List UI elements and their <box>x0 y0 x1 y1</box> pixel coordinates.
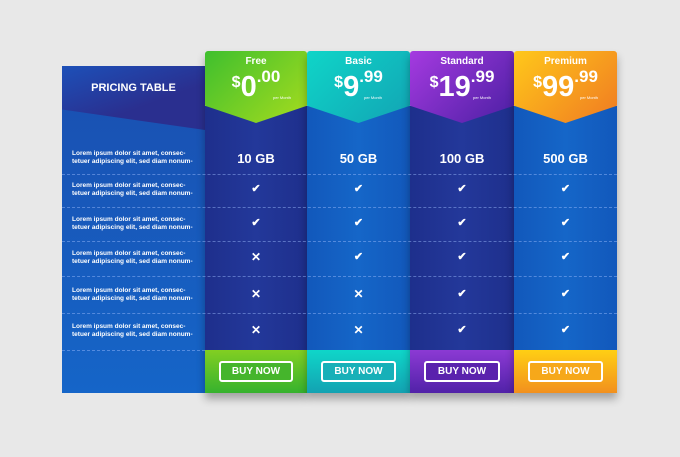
values: ✔ <box>561 251 570 263</box>
values: ✔ <box>354 217 363 229</box>
feature rows: tetuer adipiscing elit, sed diam nonum- <box>72 258 193 265</box>
feature rows: Lorem ipsum dolor sit amet, consec- <box>72 287 185 294</box>
feature rows <box>72 150 193 338</box>
values: ✕ <box>251 323 261 337</box>
column: Premium <box>514 51 617 393</box>
values: ✕ <box>251 287 261 301</box>
header: Premium: $99.99 <box>533 67 598 103</box>
values: ✕ <box>251 250 261 264</box>
header: Free: $0.00 <box>232 67 280 103</box>
values: ✔ <box>251 183 261 195</box>
values: ✔ <box>251 217 261 229</box>
values: ✔ <box>457 217 467 229</box>
button: Standard <box>410 350 514 393</box>
header: Basic: per Month <box>364 95 382 100</box>
header: Free: Free <box>245 56 267 67</box>
values: ✔ <box>457 288 467 300</box>
header: Premium <box>514 51 617 123</box>
header: Basic <box>307 51 410 123</box>
values: 10 GB <box>237 151 275 166</box>
feature rows: Lorem ipsum dolor sit amet, consec- <box>72 182 185 189</box>
title banner <box>62 66 205 130</box>
header: Basic: $9.99 <box>334 67 383 103</box>
values: 50 GB <box>340 151 377 166</box>
title: PRICING TABLE <box>91 82 176 94</box>
values: 500 GB <box>543 151 588 166</box>
column: Basic <box>307 51 410 393</box>
feature rows: tetuer adipiscing elit, sed diam nonum- <box>72 295 193 302</box>
values <box>237 151 275 337</box>
button: Free <box>205 350 307 393</box>
left panel <box>62 66 205 393</box>
feature rows: Lorem ipsum dolor sit amet, consec- <box>72 216 185 223</box>
feature rows: tetuer adipiscing elit, sed diam nonum- <box>72 190 193 197</box>
values: ✔ <box>561 183 570 195</box>
values: ✔ <box>561 217 570 229</box>
values <box>340 151 377 337</box>
feature rows: Lorem ipsum dolor sit amet, consec- <box>72 150 185 157</box>
header: Standard: Standard <box>440 56 484 67</box>
column: Standard <box>410 51 514 393</box>
values: 100 GB <box>440 151 484 166</box>
values: ✔ <box>457 324 467 336</box>
values: ✔ <box>354 183 363 195</box>
feature rows: Lorem ipsum dolor sit amet, consec- <box>72 250 185 257</box>
header: Standard: $19.99 <box>430 67 494 103</box>
button: Standard: BUY NOW <box>438 366 486 377</box>
values: ✕ <box>353 323 364 337</box>
feature rows: tetuer adipiscing elit, sed diam nonum- <box>72 331 193 338</box>
header: Premium: per Month <box>580 95 598 100</box>
values: ✔ <box>457 183 467 195</box>
values <box>543 151 588 336</box>
header: Basic: Basic <box>345 56 372 67</box>
feature rows: Lorem ipsum dolor sit amet, consec- <box>72 323 185 330</box>
button: Basic <box>307 350 410 393</box>
column: Free <box>205 51 307 393</box>
header: Standard <box>410 51 514 123</box>
button: Basic: BUY NOW <box>334 366 383 377</box>
values: ✔ <box>561 288 570 300</box>
values: ✕ <box>353 287 364 301</box>
button: Premium <box>514 350 617 393</box>
values: ✔ <box>457 251 467 263</box>
feature rows: tetuer adipiscing elit, sed diam nonum- <box>72 158 193 165</box>
values: ✔ <box>561 324 570 336</box>
values: ✔ <box>354 251 363 263</box>
button: Free: BUY NOW <box>232 366 280 377</box>
button: Premium: BUY NOW <box>541 366 590 377</box>
header: Free <box>205 51 307 123</box>
feature rows: tetuer adipiscing elit, sed diam nonum- <box>72 224 193 231</box>
header: Free: per Month <box>273 95 291 100</box>
header: Standard: per Month <box>473 95 491 100</box>
header: Premium: Premium <box>544 56 587 67</box>
values <box>440 151 484 336</box>
